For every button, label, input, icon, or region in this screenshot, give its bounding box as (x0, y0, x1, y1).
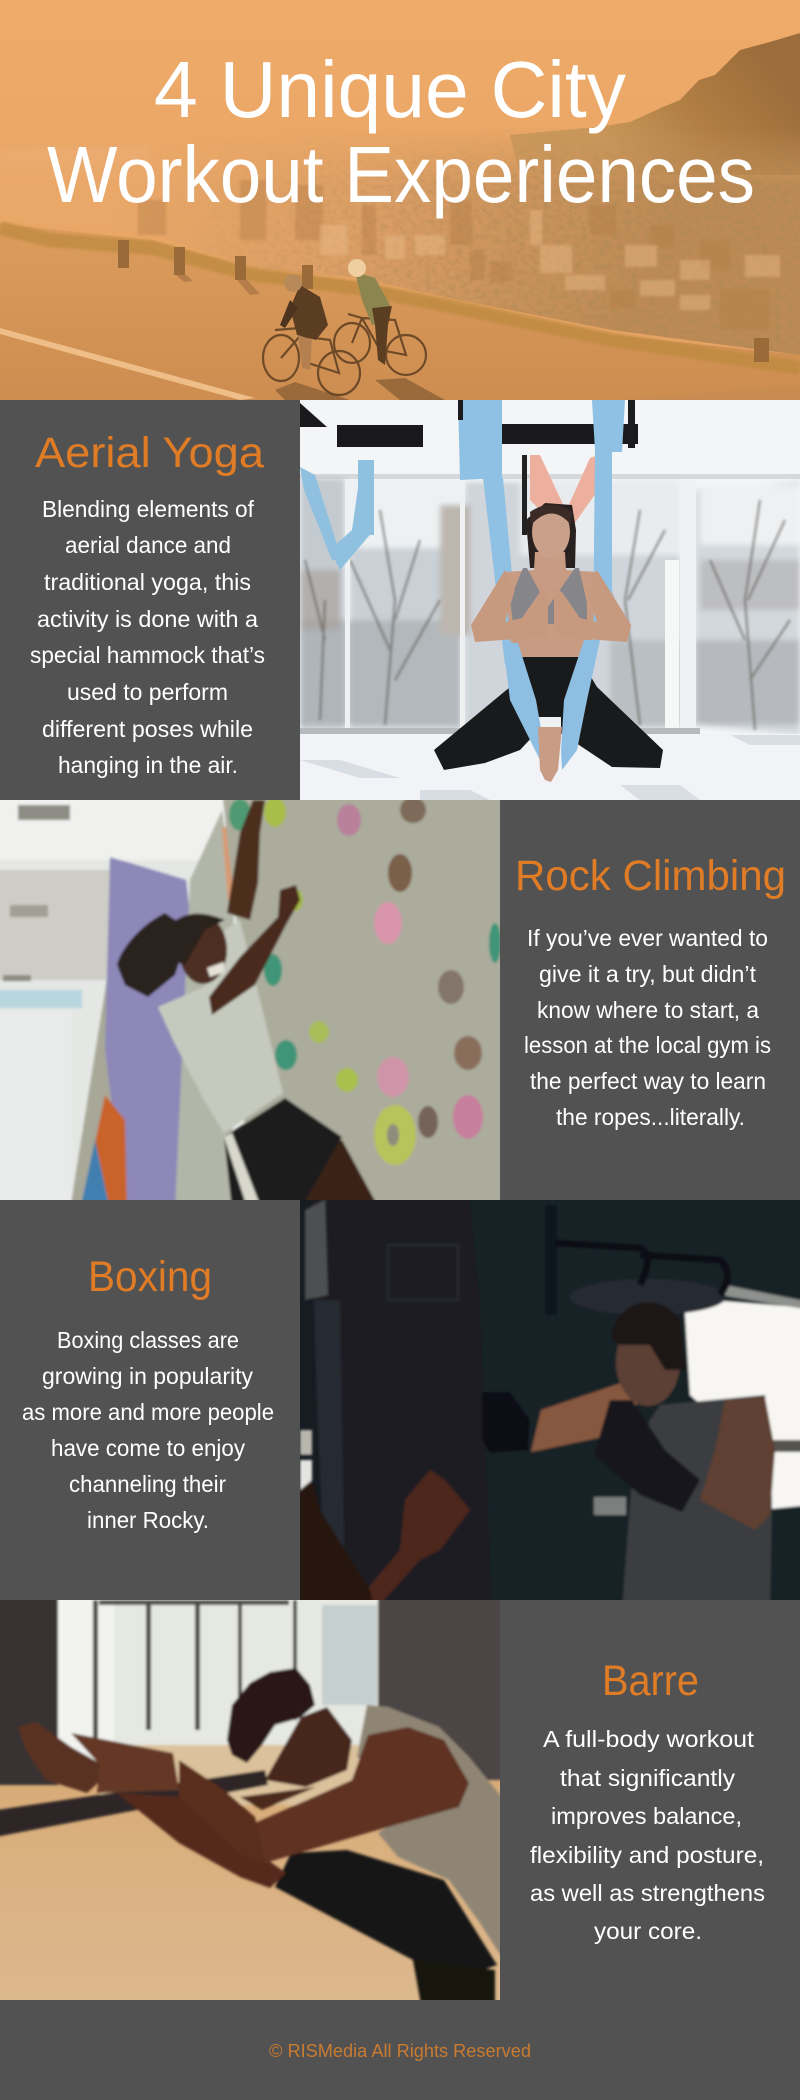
body text: Aerial Yoga: different poses while (42, 716, 253, 742)
panel: hero banner (0, 0, 800, 400)
punching bag (311, 1190, 492, 1610)
ballet bar (0, 1770, 268, 1838)
title: 4 Unique City (154, 45, 626, 134)
panel: rock climbing text (515, 852, 786, 1130)
body text: Aerial Yoga: activity is done with a (37, 606, 258, 632)
body text: Boxing (22, 1327, 274, 1533)
panel: boxing text (22, 1253, 274, 1533)
heading: Aerial Yoga: Aerial Yoga (35, 429, 264, 477)
footer credit: © RISMedia All Rights Reserved (269, 2041, 531, 2061)
boxer (482, 1303, 775, 1610)
body text: Aerial Yoga: hanging in the air. (58, 752, 238, 778)
body text: Rock Climbing: give it a try, but didn’t (539, 961, 757, 987)
body text: Aerial Yoga: traditional yoga, this (44, 569, 251, 595)
body text: Aerial Yoga: Blending elements of (42, 496, 255, 522)
ceiling cut-outs (300, 403, 638, 447)
body text: Rock Climbing: the ropes...literally. (556, 1104, 745, 1130)
body text: Barre: A full-body workout (543, 1726, 755, 1752)
body text: Aerial Yoga: special hammock that’s (30, 642, 265, 668)
body text: Aerial Yoga: used to perform (67, 679, 228, 705)
body text: Aerial Yoga (30, 496, 265, 778)
body text: Rock Climbing (524, 925, 771, 1130)
partner's hand (300, 1470, 470, 1610)
title (47, 45, 755, 219)
photo: boxing (290, 1190, 800, 1610)
body text: Aerial Yoga: aerial dance and (65, 532, 231, 558)
speed bag rack (545, 1205, 728, 1315)
body text: Rock Climbing: the perfect way to learn (530, 1068, 766, 1094)
pink hammock (530, 455, 595, 523)
body text: Barre (530, 1726, 765, 1944)
photo: rock climbing (0, 790, 510, 1210)
panel: aerial yoga text (30, 429, 265, 778)
body text: Boxing: as more and more people (22, 1399, 274, 1425)
body text: Boxing: have come to enjoy (51, 1435, 245, 1461)
climber (117, 800, 380, 1210)
heading: Rock Climbing: Rock Climbing (515, 852, 786, 900)
blue hammock straps (458, 400, 625, 665)
floor (778, 734, 800, 735)
body text: Barre: flexibility and posture, (530, 1842, 764, 1868)
body text: Barre: that significantly (560, 1765, 736, 1791)
woman (434, 503, 663, 782)
title: Workout Experiences (47, 130, 755, 219)
left hanging hammock (300, 460, 374, 570)
heading: Barre: Barre (602, 1657, 699, 1705)
body text: Rock Climbing: know where to start, a (537, 997, 759, 1023)
hero photo: city and road (0, 0, 800, 400)
body text: Rock Climbing: lesson at the local gym is (524, 1032, 771, 1058)
body text: Rock Climbing: If you’ve ever wanted to (527, 925, 768, 951)
body text: Barre: your core. (594, 1918, 702, 1944)
photo: aerial yoga (290, 390, 800, 810)
photo: barre (0, 1590, 510, 2010)
windows (300, 478, 800, 735)
dancer (18, 1668, 510, 2010)
panel: barre text (530, 1657, 765, 1944)
window light (684, 1298, 800, 1510)
body text: Boxing: inner Rocky. (87, 1507, 209, 1533)
body text: Barre: as well as strengthens (530, 1880, 765, 1906)
body text: Boxing: growing in popularity (42, 1363, 254, 1389)
body text: Barre: improves balance, (551, 1803, 742, 1829)
cyclists (263, 259, 445, 400)
body text: Boxing: Boxing classes are (57, 1327, 239, 1353)
climbing holds (229, 797, 501, 1165)
body text: Boxing: channeling their (69, 1471, 226, 1497)
heading: Boxing: Boxing (88, 1253, 212, 1301)
